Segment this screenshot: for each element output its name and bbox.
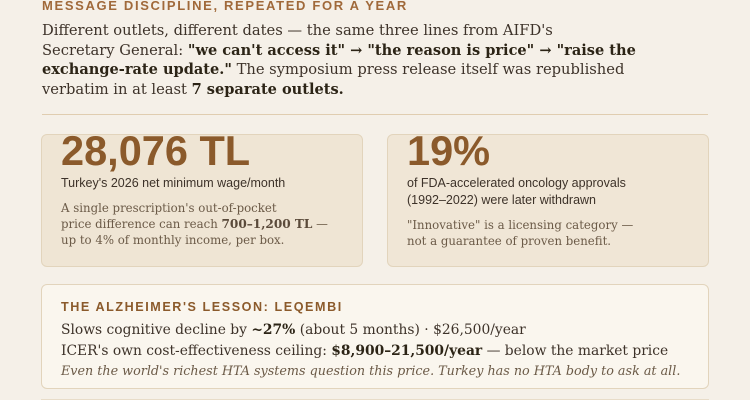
note: prescription price difference — [60, 201, 328, 247]
note: prescription price difference: up to 4% of monthly income, per box. — [61, 233, 284, 247]
stat caption: FDA approvals — [407, 176, 626, 207]
intro text block: exchange-rate update." The symposium press release itself was republished — [42, 61, 624, 78]
note: innovative category — [407, 218, 633, 248]
stat caption: FDA approvals: of FDA-accelerated oncology approvals — [407, 176, 626, 190]
text: cognitive decline and price: Slows cognitive decline by ~27% (about 5 months) · $26,500/year — [61, 322, 526, 338]
note: prescription price difference: A single prescription's out-of-pocket — [61, 201, 277, 215]
panel: minimum wage stat — [41, 134, 363, 267]
stat caption: minimum wage: Turkey's 2026 net minimum wage/month — [61, 176, 285, 190]
text: cognitive decline and price — [61, 322, 668, 359]
stat caption: FDA approvals: (1992–2022) were later withdrawn — [407, 193, 596, 207]
text: cognitive decline and price: ICER's own cost-effectiveness ceiling: $8,900–21,500/year — below the market price — [61, 343, 668, 359]
text: HTA note: Even the world's richest HTA systems question this price. Turkey has no HTA body to ask at all. — [61, 364, 680, 379]
note: prescription price difference: price difference can reach 700–1,200 TL — — [61, 217, 328, 231]
next panel top edge — [41, 399, 709, 400]
panel: FDA withdrawals stat — [387, 134, 709, 267]
intro text block — [42, 22, 636, 98]
intro text block: Different outlets, different dates — the same three lines from AIFD's — [42, 22, 553, 39]
panel heading: Leqembi: THE ALZHEIMER'S LESSON: LEQEMBI — [61, 300, 343, 314]
note: innovative category: "Innovative" is a licensing category — — [407, 218, 633, 232]
intro text block: verbatim in at least 7 separate outlets. — [42, 81, 344, 98]
panel: Alzheimer's lesson — [41, 284, 709, 389]
note: innovative category: not a guarantee of proven benefit. — [407, 234, 611, 248]
intro text block: Secretary General: "we can't access it" → "the reason is price" → "raise the — [42, 42, 636, 59]
